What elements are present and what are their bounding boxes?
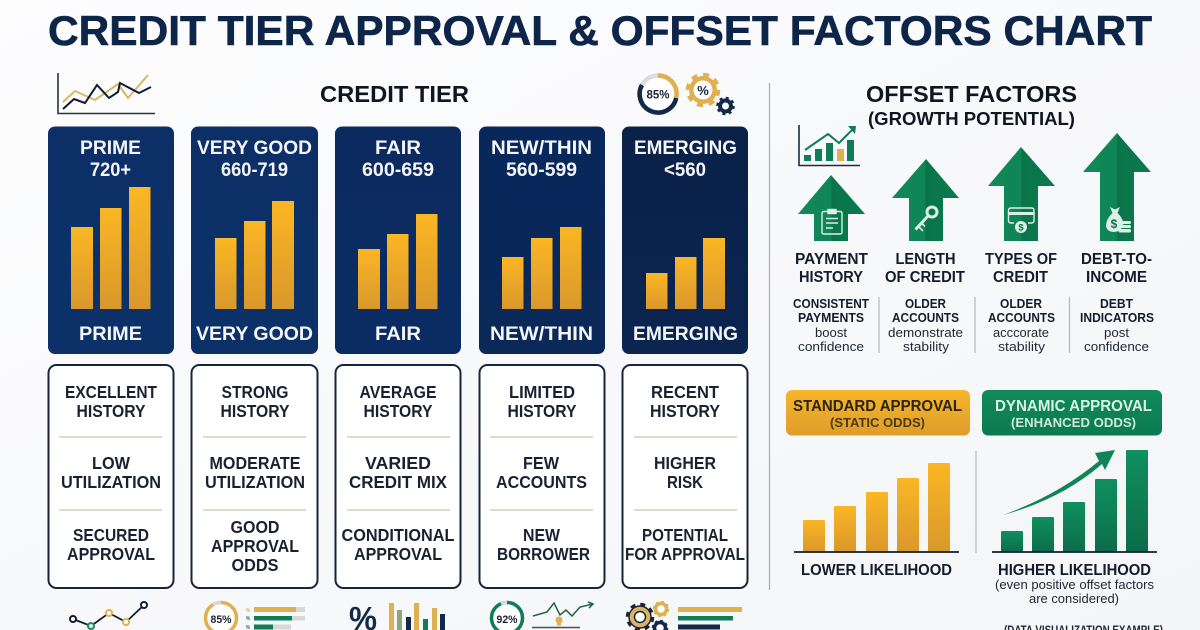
box: new/thin details: HISTORY — [508, 401, 577, 421]
arrow: growth curve — [1003, 450, 1115, 515]
box: fair details: VARIED — [365, 453, 431, 473]
note: length of credit: demonstrate — [888, 325, 963, 340]
new/thin labels: 560-599 — [506, 159, 577, 181]
heading: offset factors: OFFSET FACTORS — [866, 81, 1077, 107]
note: debt-to-income — [1080, 297, 1154, 354]
icon: 85% donut with bars — [206, 602, 305, 630]
box: very good details: ODDS — [232, 555, 278, 575]
new/thin bars — [502, 227, 582, 309]
icon: 85% donut with bars: % — [246, 608, 251, 614]
prime labels: PRIME — [80, 137, 141, 159]
label: types of credit — [985, 251, 1057, 286]
note: types of credit: acccorate — [993, 325, 1049, 340]
icon: 85% donut with bars: 85% — [210, 614, 232, 626]
icon: credit card: $ — [1018, 222, 1024, 234]
note: payment history — [793, 297, 869, 354]
label: higher likelihood: HIGHER LIKELIHOOD — [998, 562, 1151, 579]
icon: trend line with bulb — [532, 602, 593, 628]
label: length of credit — [885, 251, 966, 286]
box: very good details: UTILIZATION — [205, 472, 305, 492]
factor: types of credit — [985, 147, 1057, 354]
prime labels: PRIME — [79, 323, 142, 345]
box: prime details — [48, 365, 174, 588]
box: fair details: HISTORY — [364, 401, 433, 421]
note: length of credit — [888, 297, 963, 354]
note: payment history: boost — [815, 325, 847, 340]
icon: growth chart — [799, 125, 860, 166]
prime labels: 720+ — [90, 159, 131, 181]
box: fair details: CONDITIONAL — [342, 525, 455, 545]
icon: key — [916, 207, 937, 231]
note: debt-to-income: INDICATORS — [1080, 311, 1154, 325]
icon: 85% donut: 85% — [646, 88, 670, 102]
panel: fair — [335, 126, 461, 354]
arrow: length of credit — [892, 159, 959, 241]
fair labels: FAIR — [375, 323, 421, 345]
icon: money bag — [1106, 207, 1131, 232]
heading: offset factors: (GROWTH POTENTIAL) — [868, 109, 1075, 129]
label: length of credit: OF CREDIT — [885, 269, 966, 286]
box: emerging details: HIGHER — [654, 453, 716, 473]
box: new/thin details: LIMITED — [509, 382, 575, 402]
very good labels: 660-719 — [221, 159, 288, 181]
note: length of credit: stability — [903, 339, 950, 354]
very good labels: VERY GOOD — [196, 323, 313, 345]
factor: length of credit — [885, 159, 966, 354]
note: types of credit: OLDER — [1000, 297, 1042, 311]
panel: very good — [191, 126, 318, 354]
icon: percent gears — [688, 74, 734, 114]
button: dynamic approval: DYNAMIC APPROVAL — [995, 398, 1152, 415]
box: fair details: CREDIT MIX — [349, 472, 447, 492]
box: new/thin details: BORROWER — [497, 544, 590, 564]
label: lower likelihood: LOWER LIKELIHOOD — [801, 562, 952, 579]
icon: node line — [70, 602, 147, 629]
label: higher likelihood: are considered) — [1029, 591, 1119, 606]
note: debt-to-income: post — [1104, 325, 1129, 340]
panel: emerging — [622, 126, 748, 354]
label: debt-to-income: INCOME — [1086, 269, 1147, 286]
panel: prime — [48, 126, 174, 354]
icon: money bag: $ — [1111, 217, 1118, 231]
button: dynamic approval: (ENHANCED ODDS) — [1011, 416, 1136, 430]
note: debt-to-income: DEBT — [1100, 297, 1133, 311]
icon: credit card — [1008, 208, 1034, 234]
fair bars — [358, 214, 438, 309]
box: very good details — [192, 365, 318, 588]
note: payment history: CONSISTENT — [793, 297, 869, 311]
heading: credit tier: CREDIT TIER — [320, 81, 469, 107]
icon: 92% donut: 92% — [496, 614, 518, 626]
bar chart: dynamic approval — [992, 450, 1157, 552]
icon: line chart — [58, 73, 155, 114]
panel: new/thin — [479, 126, 605, 354]
button: dynamic approval — [982, 390, 1162, 436]
emerging bars — [646, 238, 725, 309]
box: new/thin details: NEW — [523, 525, 560, 545]
note: length of credit: OLDER — [905, 297, 946, 311]
label: payment history: PAYMENT — [795, 251, 869, 268]
icon: percent with bars — [349, 600, 445, 630]
title: CREDIT TIER APPROVAL & OFFSET FACTORS CHART — [48, 7, 1152, 54]
box: prime details: LOW — [92, 453, 130, 473]
emerging labels: EMERGING — [634, 137, 737, 159]
box: prime details: UTILIZATION — [61, 472, 161, 492]
button: standard approval: STANDARD APPROVAL — [793, 398, 962, 415]
arrow: payment history — [798, 175, 865, 241]
label: types of credit: TYPES OF — [985, 251, 1057, 268]
very good labels — [196, 137, 313, 345]
emerging labels: <560 — [664, 159, 706, 181]
label: debt-to-income: DEBT-TO- — [1081, 251, 1152, 268]
box: very good details: MODERATE — [210, 453, 300, 473]
heading: offset factors — [866, 81, 1077, 129]
note: payment history: PAYMENTS — [798, 311, 864, 325]
box: prime details: APPROVAL — [67, 544, 155, 564]
icon: 85% donut — [640, 75, 677, 113]
box: fair details — [336, 365, 460, 588]
icon: gears with bars — [628, 602, 742, 630]
box: fair details: APPROVAL — [354, 544, 442, 564]
box: prime details: SECURED — [73, 525, 149, 545]
box: emerging details: FOR APPROVAL — [625, 544, 745, 564]
box: prime details: EXCELLENT — [65, 382, 157, 402]
bar chart: standard approval — [794, 463, 959, 552]
box: new/thin details: ACCOUNTS — [496, 472, 587, 492]
box: new/thin details: FEW — [523, 453, 559, 473]
factor: payment history — [793, 175, 869, 354]
box: very good details: GOOD — [230, 517, 280, 537]
label: higher likelihood: (even positive offset factors — [995, 577, 1154, 592]
icon: percent gears: % — [697, 83, 709, 98]
note: length of credit: ACCOUNTS — [892, 311, 959, 325]
box: very good details: HISTORY — [220, 401, 290, 421]
new/thin labels — [490, 137, 593, 345]
box: prime details: HISTORY — [76, 401, 146, 421]
icon: 85% donut with bars: % — [246, 616, 251, 622]
very good bars — [215, 201, 294, 309]
note: types of credit: stability — [998, 339, 1046, 354]
emerging labels — [633, 137, 738, 345]
prime labels — [79, 137, 142, 345]
factor: debt-to-income — [1080, 133, 1154, 354]
label: length of credit: LENGTH — [896, 251, 956, 268]
label: payment history — [795, 251, 869, 286]
box: very good details: APPROVAL — [211, 536, 299, 556]
note: types of credit: ACCOUNTS — [988, 311, 1055, 325]
label: debt-to-income — [1081, 251, 1152, 286]
box: emerging details: RISK — [667, 472, 703, 492]
new/thin labels: NEW/THIN — [490, 323, 593, 345]
arrow: debt-to-income — [1083, 133, 1151, 241]
emerging labels: EMERGING — [633, 323, 738, 345]
button: standard approval: (STATIC ODDS) — [830, 416, 925, 430]
fair labels — [362, 137, 434, 345]
note: debt-to-income: confidence — [1084, 339, 1149, 354]
box: emerging details: HISTORY — [650, 401, 720, 421]
arrow: types of credit — [988, 147, 1055, 241]
label: payment history: HISTORY — [799, 269, 864, 286]
very good labels: VERY GOOD — [197, 137, 312, 159]
box: very good details: STRONG — [222, 382, 288, 402]
icon: clipboard — [822, 210, 842, 234]
label: higher likelihood — [995, 562, 1154, 606]
button: standard approval — [786, 390, 970, 436]
new/thin labels: NEW/THIN — [491, 137, 592, 159]
fair labels: FAIR — [375, 137, 421, 159]
box: new/thin details — [480, 365, 604, 588]
box: fair details: AVERAGE — [360, 382, 436, 402]
prime bars — [71, 187, 150, 309]
label: types of credit: CREDIT — [993, 269, 1048, 286]
box: emerging details — [622, 365, 748, 588]
note: payment history: confidence — [798, 339, 864, 354]
box: emerging details: RECENT — [651, 382, 719, 402]
box: emerging details: POTENTIAL — [642, 525, 728, 545]
note: types of credit — [988, 297, 1055, 354]
icon: 92% donut — [492, 602, 522, 630]
fair labels: 600-659 — [362, 159, 434, 181]
